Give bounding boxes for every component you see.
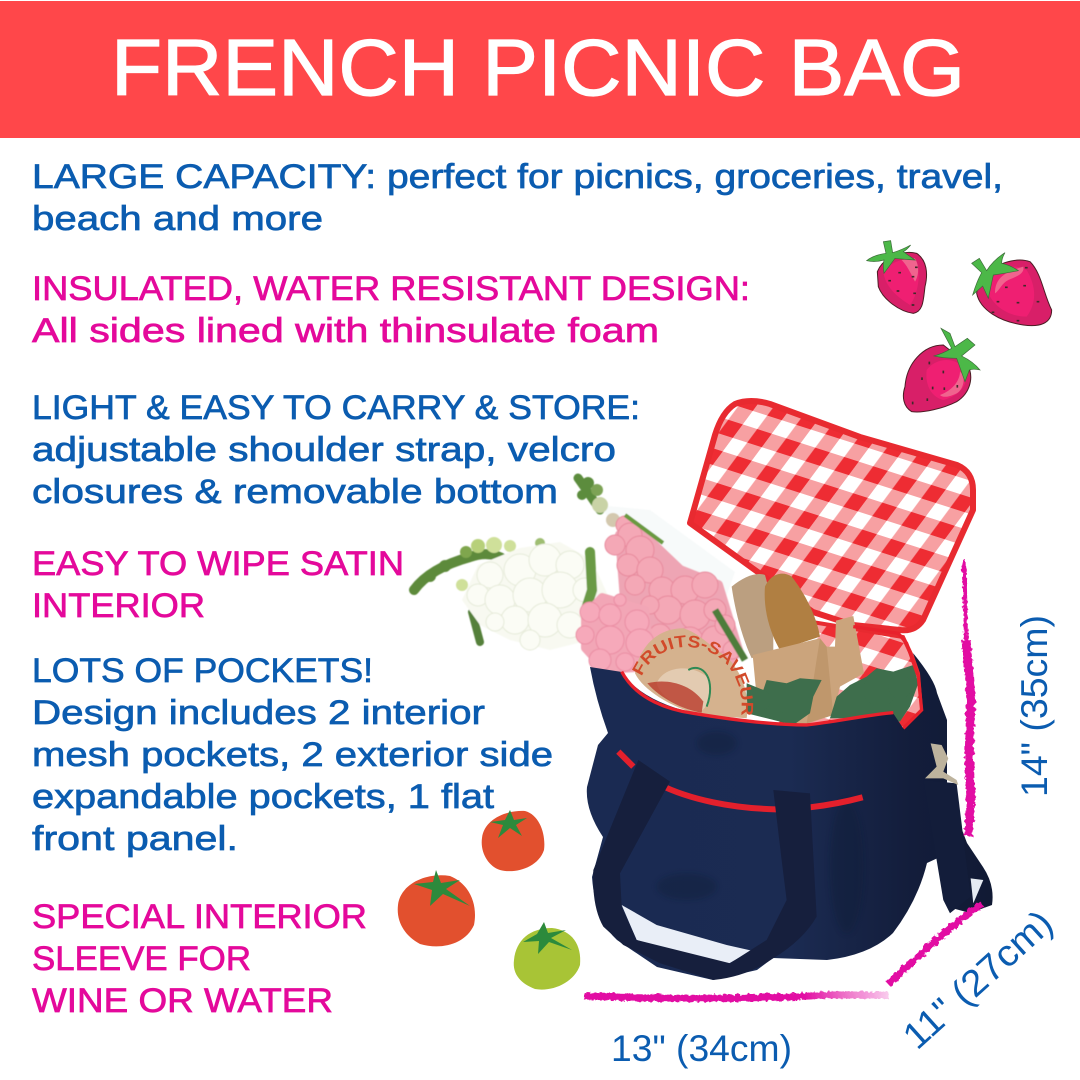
plastic sleeve: [597, 505, 735, 600]
bag hardware and straps: [593, 732, 983, 980]
tomato green: [514, 922, 580, 990]
bag body: [587, 653, 993, 980]
side buckle: [925, 743, 958, 785]
pink stock flower upper: [577, 477, 745, 670]
feature: wine sleeve: SPECIAL INTERIOR: [32, 898, 367, 936]
feature: wine sleeve: SLEEVE FOR: [32, 940, 251, 978]
removable white bottom: [622, 905, 752, 967]
feature: wine sleeve: WINE OR WATER: [32, 982, 333, 1020]
interior lining: [780, 620, 923, 732]
title banner: [0, 1, 1080, 138]
dimension: width: 13" (34cm): [611, 1028, 792, 1069]
side strap: [923, 780, 971, 913]
feature: satin interior: [32, 545, 404, 625]
feature: pockets: [32, 652, 553, 858]
pink stock flower lower: [576, 594, 654, 671]
bag lid gingham lining: [690, 401, 973, 630]
red pocket piping: [618, 752, 863, 809]
title: FRENCH PICNIC BAG: [111, 23, 965, 112]
feature: pockets: expandable pockets, 1 flat: [32, 778, 495, 816]
feature: pockets: front panel.: [32, 820, 238, 858]
feature: large capacity: LARGE CAPACITY: perfect for picnics, groceries, travel,: [32, 158, 1003, 196]
feature: insulated: INSULATED, WATER RESISTANT DESIGN:: [32, 270, 750, 308]
strawberry 2: [972, 253, 1052, 326]
feature: light and easy: LIGHT & EASY TO CARRY & STORE:: [32, 389, 640, 427]
feature: satin interior: INTERIOR: [32, 587, 205, 625]
feature: pockets: mesh pockets, 2 exterior side: [32, 736, 553, 774]
flowers: [414, 477, 745, 671]
fabric shading: [657, 732, 863, 933]
icon: tomatoes: [398, 810, 580, 990]
feature: large capacity: [32, 158, 1003, 238]
carry strap: [593, 760, 817, 980]
feature: pockets: LOTS OF POCKETS!: [32, 652, 373, 690]
feature: light and easy: closures & removable bottom: [32, 473, 558, 511]
feature: insulated: All sides lined with thinsulate foam: [32, 312, 659, 350]
white stock flower: [414, 537, 610, 650]
baguette right: [765, 574, 820, 650]
picnic bag photo: [408, 398, 993, 980]
feature: light and easy: [32, 389, 640, 511]
strawberry 1: [867, 241, 927, 313]
feature: wine sleeve: [32, 898, 367, 1020]
feature: large capacity: beach and more: [32, 200, 323, 238]
dimension: depth: 11" (27cm): [895, 902, 1061, 1057]
tomato large: [398, 870, 475, 946]
zipper trim: [622, 627, 922, 728]
feature: satin interior: EASY TO WIPE SATIN: [32, 545, 404, 583]
measure line: height: [964, 560, 971, 836]
measure line: width: [584, 995, 888, 998]
bread wheel with label: [632, 628, 754, 718]
feature: pockets: Design includes 2 interior: [32, 694, 485, 732]
measure line: depth: [888, 904, 982, 984]
wheel text: FRUITS-SAVEUR: [632, 635, 754, 715]
strawberry 3: [903, 328, 980, 412]
tomato small: [482, 810, 544, 871]
food contents: [632, 574, 918, 724]
kale: [747, 665, 918, 725]
feature: insulated: [32, 270, 750, 350]
icon: strawberries: [867, 241, 1052, 412]
feature: light and easy: adjustable shoulder strap, velcro: [32, 431, 616, 469]
dimension: height: 14" (35cm): [1014, 615, 1055, 797]
baguette left: [732, 574, 773, 658]
paper bag: [753, 616, 864, 725]
